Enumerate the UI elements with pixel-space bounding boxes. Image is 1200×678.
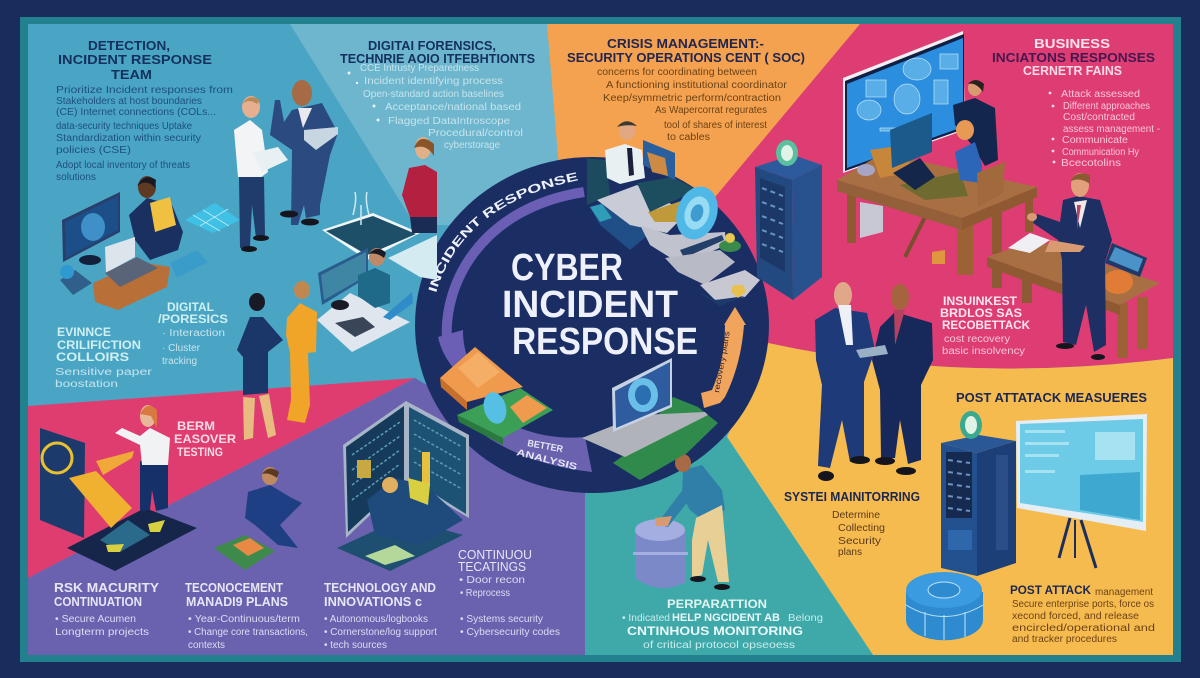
testing scene: woman, panel, tablet xyxy=(40,405,197,571)
woman xyxy=(410,217,437,233)
two central-left colleagues xyxy=(234,80,338,252)
text: business responses body: Communication Hy xyxy=(1062,147,1139,158)
white coat man xyxy=(234,120,268,178)
bottom purple column: risk: CONTINUATION xyxy=(54,595,142,609)
text: digital forensics body: Flagged DataIntroscope xyxy=(388,116,511,127)
barrel xyxy=(635,532,686,588)
system recovery testing label: EASOVER xyxy=(174,434,237,446)
map table xyxy=(322,213,420,260)
heading: detection team xyxy=(58,38,212,82)
hub disc xyxy=(415,157,769,493)
text: post attack management: xecond forced, and release xyxy=(1012,611,1139,622)
left teal text blocks xyxy=(55,327,153,390)
left businessman xyxy=(815,308,875,468)
red jacket woman with map table xyxy=(322,137,437,280)
heading: detection team: TEAM xyxy=(111,67,152,82)
handshake figures xyxy=(815,282,933,481)
heading and text: system monitoring: plans xyxy=(838,547,862,558)
text: insurance block: BRDLOS SAS xyxy=(940,308,1022,320)
glowing shield xyxy=(670,181,724,245)
heading: crisis management: SECURITY OPERATIONS CENT ( SOC) xyxy=(567,50,805,65)
purple ring arc xyxy=(447,192,584,340)
text: preparation block: CNTINHOUS MONITORING xyxy=(627,624,803,638)
desk clutter xyxy=(870,145,912,178)
bottom purple column: continuous testing: • Cybersecurity codes xyxy=(460,627,560,638)
digital forensics small block: /PORESICS xyxy=(158,314,228,326)
text: post attack management: and tracker procedures xyxy=(1012,634,1117,645)
bottom purple column: continuous testing: • Reprocess xyxy=(460,588,510,599)
light slab xyxy=(388,235,437,280)
text: business responses body: assess management - xyxy=(1063,124,1160,135)
text: crisis management body: A functioning institutional coordinator xyxy=(606,80,788,91)
orange arrow xyxy=(701,307,746,408)
heading: detection team: DETECTION, xyxy=(88,38,170,53)
analyst xyxy=(605,144,645,184)
text: business responses body: Cost/contracted xyxy=(1063,112,1135,123)
text: detection team body: solutions xyxy=(56,172,96,183)
analyst at monitor xyxy=(317,248,413,352)
seated staff member xyxy=(955,142,982,183)
yellow figure xyxy=(286,303,317,423)
table top xyxy=(987,240,1160,305)
text: post attack management: POST ATTACK xyxy=(1010,583,1091,597)
curved ring label: INCIDENT RESPONSE xyxy=(428,172,578,292)
table legs xyxy=(992,268,1002,288)
left teal text blocks: COLLOIRS xyxy=(56,352,129,364)
laptop xyxy=(105,237,135,273)
text: crisis management body xyxy=(597,67,788,143)
heading: crisis management xyxy=(567,36,805,65)
text: digital forensics body xyxy=(348,63,523,151)
papers under desk xyxy=(860,202,883,238)
gold base xyxy=(648,198,690,222)
kneeling person with brick model xyxy=(214,467,302,570)
dark desk xyxy=(637,177,697,212)
seated person xyxy=(129,198,183,260)
text: post attack management: management xyxy=(1095,587,1153,598)
text: business responses body: Different approaches xyxy=(1063,101,1150,112)
whiteboard on easel xyxy=(1016,414,1147,568)
digital forensics small block: · Interaction xyxy=(162,328,225,339)
yellow data stream xyxy=(69,471,132,528)
orange vase xyxy=(1103,270,1133,294)
text: detection team body: (CE) Internet connections (COLs... xyxy=(56,107,216,118)
hub title xyxy=(502,247,698,363)
gold badge xyxy=(731,285,746,298)
wall panel xyxy=(40,428,85,538)
heading and text: system monitoring: SYSTEI MAINITORRING xyxy=(784,489,920,504)
bottom purple column: technology: TECHNOLOGY AND xyxy=(324,581,436,595)
teal server block xyxy=(587,158,610,205)
hub title: CYBER xyxy=(511,247,623,289)
text: digital forensics body: CCE Intrusty Preparedness xyxy=(360,63,479,74)
monitor xyxy=(318,248,368,305)
text: digital forensics body: Procedural/control xyxy=(428,128,523,139)
chair xyxy=(977,162,1005,207)
text: detection team body: Adopt local inventory of threats xyxy=(56,160,190,171)
system recovery testing label: TESTING xyxy=(177,447,223,459)
digital forensics small block xyxy=(158,302,228,367)
wooden desk with staff xyxy=(837,80,1037,275)
system recovery testing label: BERM xyxy=(177,421,215,433)
bottom purple column: technology: • Cornerstone/log support xyxy=(324,627,437,638)
text: post attack management: Secure enterprise ports, force os xyxy=(1012,599,1154,610)
text: preparation block: Belong xyxy=(788,613,823,624)
text: preparation block: of critical protocol opseoess xyxy=(643,640,795,651)
heading: business responses: CERNETR FAINS xyxy=(1023,63,1122,78)
text: preparation block: PERPARATTION xyxy=(667,599,767,611)
digital forensics small block: tracking xyxy=(162,356,197,367)
bottom purple column: management xyxy=(185,581,308,651)
orange desk xyxy=(93,262,170,310)
arrow label: recovery plans xyxy=(712,331,732,393)
hub title: RESPONSE xyxy=(512,321,698,363)
monitor xyxy=(62,192,120,262)
bottom purple column: risk: • Secure Acumen xyxy=(55,614,136,625)
text: digital forensics body: Acceptance/national based xyxy=(385,102,521,113)
blue data drum xyxy=(906,572,983,640)
grey layer xyxy=(597,185,687,233)
text: insurance block xyxy=(940,296,1031,357)
heading: business responses: INCIATONS RESPONSES xyxy=(992,50,1155,65)
text: crisis management body: As Wapercorrat regurates xyxy=(655,105,767,116)
analyst monitor xyxy=(643,140,675,180)
server rack upper xyxy=(755,140,822,300)
server rack lower right xyxy=(941,411,1016,576)
right panel xyxy=(406,401,469,518)
heading: business responses xyxy=(992,36,1155,78)
navy suit man xyxy=(270,100,338,225)
text: post attack management: encircled/operational and xyxy=(1012,623,1155,634)
small purple ring segment xyxy=(438,330,470,370)
bottom purple column: continuous testing: CONTINUOU xyxy=(458,548,532,562)
text: detection team body: Stakeholders at host boundaries xyxy=(56,96,202,107)
bottom purple column: risk: RSK MACURITY xyxy=(54,581,160,595)
floor board xyxy=(337,518,463,571)
text: detection team body: policies (CSE) xyxy=(56,145,131,156)
text: crisis management body: tool of shares of interest xyxy=(664,120,767,131)
system recovery testing label xyxy=(174,421,237,459)
blue lower layers xyxy=(590,200,648,250)
heading: detection team: INCIDENT RESPONSE xyxy=(58,52,212,67)
person xyxy=(358,268,390,308)
bottom purple column: management: • Change core transactions, xyxy=(188,627,308,638)
bottom purple column: technology: • tech sources xyxy=(324,640,387,651)
heading: crisis management: CRISIS MANAGEMENT:- xyxy=(607,36,764,51)
lower arc label: ANALYSIS xyxy=(515,447,578,473)
bottom purple column: technology: • Autonomous/logbooks xyxy=(324,614,428,625)
text: business responses body xyxy=(1049,89,1160,169)
desk xyxy=(317,293,410,352)
heading and text: system monitoring: Security xyxy=(838,536,881,547)
laptop xyxy=(1105,243,1147,277)
small blue stack xyxy=(60,270,92,295)
bottom purple column: technology xyxy=(324,581,437,651)
text: digital forensics body: Open-standard action baselines xyxy=(363,89,504,100)
suit xyxy=(1033,196,1112,352)
left teal text blocks: CRILIFICTION xyxy=(57,340,141,352)
text: business responses body: Attack assessed xyxy=(1061,89,1140,100)
standing staff member xyxy=(953,98,998,166)
bottom purple column: continuous testing xyxy=(458,548,560,638)
central hub xyxy=(415,157,769,493)
text: business responses body: Communicate xyxy=(1062,135,1128,146)
heading: digital forensics: DIGITAI FORENSICS, xyxy=(368,38,496,53)
blue laptop xyxy=(383,292,413,320)
left teal text blocks: boostation xyxy=(55,379,118,390)
desk legs xyxy=(847,192,856,243)
hub title: INCIDENT xyxy=(502,284,678,326)
small green item xyxy=(719,240,741,252)
text: detection team body xyxy=(56,85,233,183)
person xyxy=(682,465,725,522)
heading and text: system monitoring: Collecting xyxy=(838,523,885,534)
text: digital forensics body: cyberstorage xyxy=(444,140,500,151)
text: preparation block: HELP NGCIDENT AB xyxy=(672,612,780,624)
left desk scene: seated person and computers xyxy=(60,176,240,310)
text: insurance block: basic insolvency xyxy=(942,346,1025,357)
heading: post attack measures: POST ATTATACK MEASUERES xyxy=(956,390,1147,405)
blue grid tile xyxy=(185,203,240,233)
bottom purple column: continuous testing: • Systems security xyxy=(460,614,543,625)
lower hub: bricks and shield on green board xyxy=(440,347,553,445)
text: insurance block: INSUINKEST xyxy=(943,296,1017,308)
heading and text: system monitoring xyxy=(784,489,920,558)
text: crisis management body: Keep/symmetric perform/contraction xyxy=(603,93,781,104)
lower purple arc xyxy=(487,427,592,472)
text: business responses body: Bcecotolins xyxy=(1061,158,1121,169)
bottom purple column: management: • Year-Continuous/term xyxy=(188,614,300,625)
navy woman xyxy=(243,397,255,440)
lower hub: monitor on desk with green stack xyxy=(582,358,718,480)
document in handshake xyxy=(856,345,888,358)
woman xyxy=(140,461,168,511)
man with barrel xyxy=(633,454,730,590)
text: crisis management body: concerns for coordinating between xyxy=(597,67,757,78)
figure and machinery xyxy=(367,478,463,545)
heading and text: system monitoring: Determine xyxy=(832,510,880,521)
digital forensics small block: · Cluster xyxy=(162,343,201,354)
book xyxy=(1008,233,1050,253)
signal antenna xyxy=(353,192,369,225)
big blue dashboard monitor xyxy=(843,31,965,173)
server panels technology scene xyxy=(337,401,469,571)
bottom purple column: continuous testing: • Door recon xyxy=(459,575,525,586)
right businessman xyxy=(872,312,933,464)
upper hub scene: analyst, books, shield xyxy=(587,121,760,306)
bottom purple column: management: contexts xyxy=(188,640,225,651)
text: insurance block: cost recovery xyxy=(944,334,1010,345)
desk top xyxy=(837,153,1037,218)
text: detection team body: Standardization within security xyxy=(56,133,201,144)
book stacks xyxy=(640,225,726,265)
text: insurance block: RECOBETTACK xyxy=(942,320,1031,332)
heading: business responses: BUSINESS xyxy=(1034,36,1110,51)
digital forensics small block: DIGITAL xyxy=(167,302,214,314)
bottom purple column: risk: Longterm projects xyxy=(55,627,149,638)
lower arc label xyxy=(515,438,578,473)
text: detection team body: data-security techniques Uptake xyxy=(56,121,192,132)
left teal text blocks: EVINNCE xyxy=(57,327,111,339)
bottom purple column: technology: INNOVATIONS c xyxy=(324,595,422,609)
bottom purple column: management: TECONOCEMENT xyxy=(185,581,283,595)
text: digital forensics body: Incident identifying process xyxy=(364,76,503,87)
lower arc label: BETTER xyxy=(526,438,564,455)
desk monitor xyxy=(890,113,932,168)
heading: digital forensics xyxy=(340,38,535,66)
navy and yellow colleagues xyxy=(237,281,317,440)
bottom purple column: management: MANADI9 PLANS xyxy=(186,595,288,609)
tablet xyxy=(67,508,197,571)
text: preparation block xyxy=(622,599,823,651)
bottom purple column: continuous testing: TECATINGS xyxy=(458,560,526,574)
heading: digital forensics: TECHNRIE AOIO ITFEBHTIONTS xyxy=(340,51,535,66)
text: preparation block: • Indicated xyxy=(622,613,670,624)
text: crisis management body: to cables xyxy=(667,132,710,143)
left panel xyxy=(343,401,406,538)
text: detection team body: Prioritize Incident responses from xyxy=(56,85,233,96)
text: post attack management xyxy=(1010,583,1155,645)
left teal text blocks: Sensitive paper xyxy=(55,367,153,378)
bottom purple column: risk xyxy=(54,581,160,638)
right standing man with side table xyxy=(987,173,1160,360)
